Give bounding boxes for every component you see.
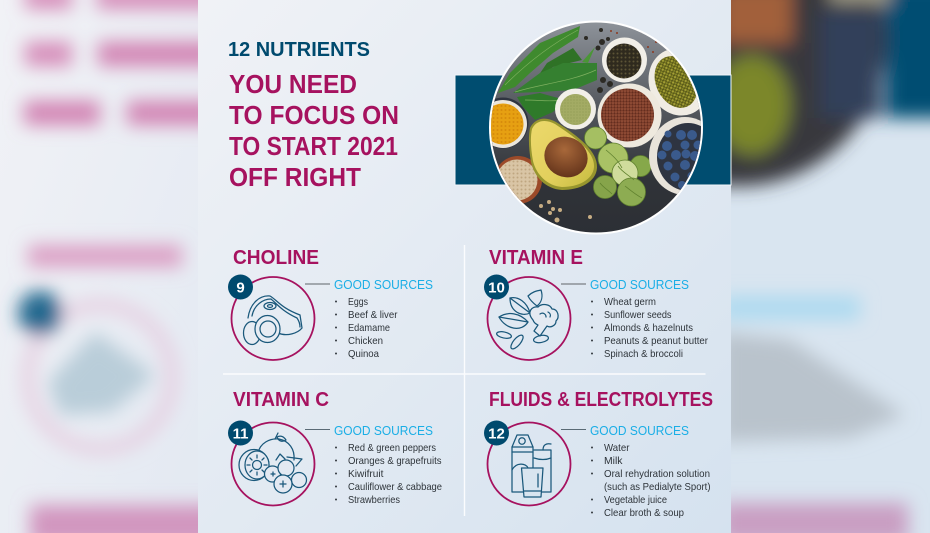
- panel: vitamin c: [228, 389, 442, 506]
- spinach leaves: [498, 26, 597, 120]
- source list: Milk: [604, 455, 623, 467]
- source list: Oranges & grapefruits: [348, 455, 442, 467]
- panel: fluids and electrolytes: [484, 389, 713, 519]
- source list: Strawberries: [348, 494, 400, 506]
- number badge 10: [484, 274, 509, 300]
- icon: kiwi, orange and berries: [232, 422, 314, 506]
- panel: choline: [228, 247, 433, 360]
- heading: vitamin c: VITAMIN C: [233, 389, 329, 411]
- source list: Edamame: [348, 322, 390, 334]
- connector: [561, 283, 586, 285]
- central infographic panel: [198, 0, 731, 533]
- number badge 12: 12: [488, 426, 505, 442]
- connector: [561, 428, 586, 430]
- source list: [591, 442, 710, 519]
- source list: Quinoa: [348, 348, 379, 360]
- food photo circle: [489, 20, 703, 234]
- blurred right background panel: [731, 0, 930, 533]
- number badge 9: 9: [236, 280, 245, 296]
- scattered dark seeds: [584, 28, 613, 93]
- connector: [305, 283, 330, 285]
- number badge 12: [484, 420, 509, 446]
- heading: fluids and electrolytes: FLUIDS & ELECTROLYTES: [489, 389, 713, 411]
- source list: Eggs: [348, 296, 368, 308]
- good sources label: GOOD SOURCES: [334, 423, 433, 438]
- good sources label: GOOD SOURCES: [334, 277, 433, 292]
- divider lines: [223, 245, 706, 516]
- blurred left background panel: [0, 0, 220, 533]
- source list: Clear broth & soup: [604, 507, 684, 519]
- turmeric bowl: [491, 98, 528, 148]
- source list: Chicken: [348, 335, 383, 347]
- source list: Sunflower seeds: [604, 309, 672, 321]
- title: OFF RIGHT: [229, 164, 361, 192]
- mung bean bowl: [648, 50, 700, 116]
- source list: Kiwifruit: [348, 468, 384, 480]
- source list: Vegetable juice: [604, 494, 667, 506]
- title: TO FOCUS ON: [229, 102, 399, 130]
- blueberry bowl: [649, 117, 701, 194]
- heading: choline: CHOLINE: [233, 247, 319, 269]
- flax bowl: [598, 84, 662, 148]
- scattered oats: [539, 200, 592, 222]
- matcha bowl: [555, 88, 596, 130]
- icon: meat and eggs: [232, 277, 314, 360]
- source list: Oral rehydration solution: [604, 468, 710, 480]
- source list: (such as Pedialyte Sport): [604, 481, 710, 493]
- source list: Cauliflower & cabbage: [348, 481, 442, 493]
- number badge 11: [228, 420, 253, 446]
- source list: Beef & liver: [348, 309, 398, 321]
- number badge 10: 10: [488, 280, 505, 296]
- number badge 9: [228, 274, 253, 300]
- source list: [335, 442, 442, 506]
- panel: vitamin e: [484, 247, 708, 360]
- connector: [305, 428, 330, 430]
- title: 12 NUTRIENTS: [228, 39, 370, 61]
- source list: [591, 296, 708, 360]
- source list: Water: [604, 442, 630, 454]
- tea bowl: [602, 38, 647, 82]
- good sources label: GOOD SOURCES: [590, 423, 689, 438]
- source list: [335, 296, 398, 360]
- source list: Red & green peppers: [348, 442, 436, 454]
- oats bowl: [494, 156, 542, 204]
- icon: carton and glasses: [488, 422, 570, 506]
- icon: leaves, broccoli and seeds: [488, 277, 570, 360]
- number badge 11: 11: [233, 426, 248, 442]
- source list: Almonds & hazelnuts: [604, 322, 693, 334]
- title: YOU NEED: [229, 71, 357, 99]
- avocado: [529, 119, 597, 190]
- brussels sprouts: [584, 127, 651, 206]
- title: [228, 39, 399, 192]
- source list: Spinach & broccoli: [604, 348, 683, 360]
- source list: Wheat germ: [604, 296, 656, 308]
- source list: Peanuts & peanut butter: [604, 335, 708, 347]
- teal band behind photo: [455, 75, 731, 185]
- heading: vitamin e: VITAMIN E: [489, 247, 583, 269]
- title: TO START 2021: [229, 133, 398, 161]
- good sources label: GOOD SOURCES: [590, 277, 689, 292]
